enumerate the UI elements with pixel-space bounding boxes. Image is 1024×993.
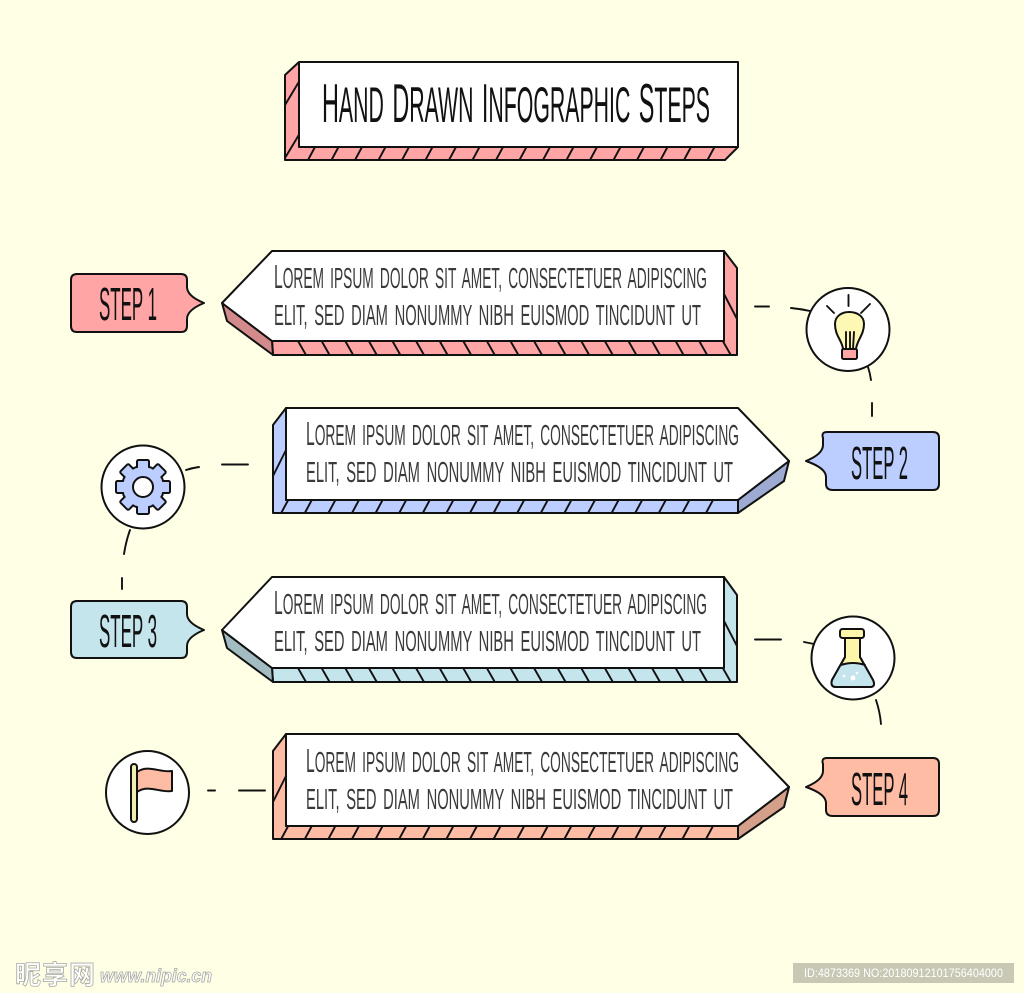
icon: gear: [102, 446, 184, 528]
callout: step 1: [71, 274, 204, 332]
callout: step 4: STEP 4: [851, 763, 908, 815]
panel: step 2 box: [273, 408, 789, 513]
panel: step 3 box: [222, 577, 737, 682]
icon: flask: [812, 616, 894, 700]
callout: step 3: [71, 601, 204, 658]
callout: step 3: STEP 3: [99, 605, 157, 657]
connector: step 1 to bulb to step 2: [755, 306, 872, 416]
panel: title banner: [285, 62, 738, 160]
watermark: site logo: [15, 955, 212, 992]
connector: flag to step 4 box: [208, 790, 265, 792]
callout: step 4: [806, 758, 939, 816]
icon: light bulb: [806, 288, 890, 371]
watermark: site logo: 昵享网: [15, 955, 95, 992]
watermark: site logo: www.nipic.cn: [100, 966, 212, 986]
panel: step 1 box: [222, 251, 737, 355]
callout: step 1: STEP 1: [99, 278, 157, 330]
connector: step 2 to gear to step 3: [122, 464, 248, 589]
watermark: image id: [793, 963, 1014, 983]
connector: step 3 to flask to step 4: [755, 640, 881, 724]
panel: step 4 box: [273, 734, 789, 839]
title text: HAND DRAWN INFOGRAPHIC STEPS: [322, 72, 710, 134]
watermark: image id: ID:4873369 NO:20180912101756404000: [804, 966, 1003, 980]
callout: step 2: [806, 432, 939, 490]
callout: step 2: STEP 2: [851, 437, 908, 489]
icon: flag: [106, 751, 189, 834]
